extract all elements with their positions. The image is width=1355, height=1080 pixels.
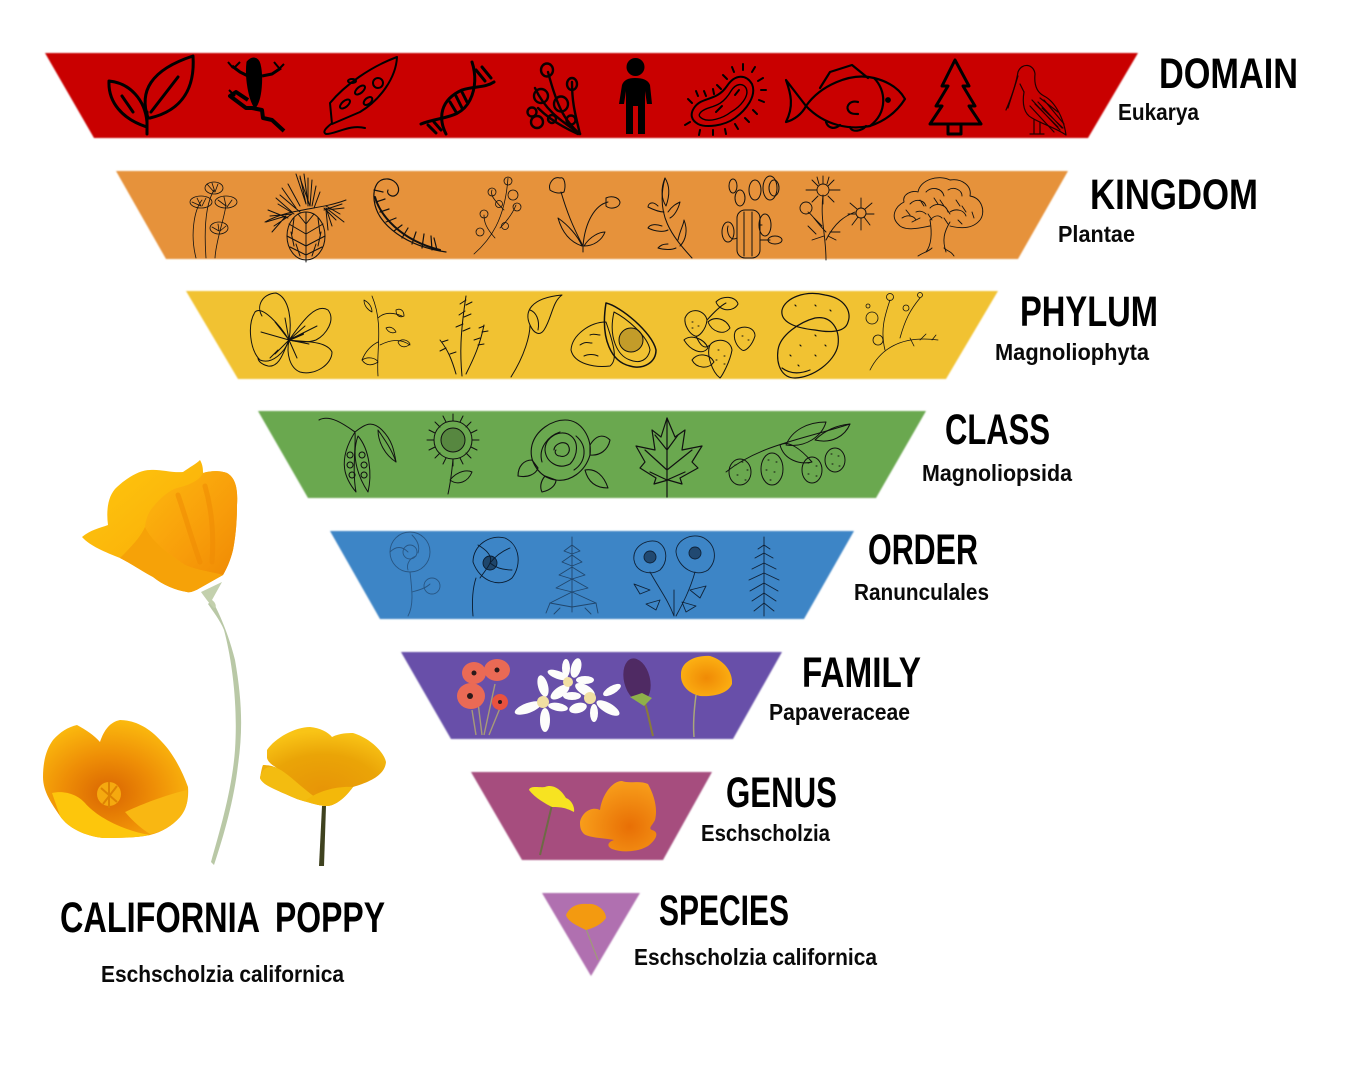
icon: cactus [722,176,782,258]
label: california poppy title: POPPY [275,894,385,942]
icon: potatoes [778,293,849,378]
label: phylum: PHYLUM [1020,288,1158,336]
icon: leafy branch [648,178,692,258]
icon: white bloodroot flowers [513,657,623,732]
icon: orange poppy [681,656,732,737]
tier: class [258,411,926,498]
icon: pea pods [319,418,396,492]
flower: cup bloom with stem [260,727,386,866]
icon: avocado [571,303,656,367]
icon: rose [518,420,610,492]
icon: poppy sketch dark [472,537,518,616]
icon: hibiscus [250,293,332,373]
icon: frog [228,58,284,131]
tier: family [401,652,782,739]
icon: red poppies [457,659,510,735]
tier: kingdom [116,171,1068,262]
icon: yellow poppy [529,786,574,855]
icon: strawberries [684,297,755,378]
icon: fern fiddlehead [374,179,446,252]
tier: order [330,531,854,619]
icon: oak tree [894,178,983,256]
label: family: FAMILY [802,649,921,697]
sublabel: papaveraceae: Papaveraceae [769,699,910,725]
band: phylum [186,291,998,379]
icon: maple leaf [636,418,702,497]
icon: plant sprout [109,56,193,134]
band: genus [471,772,712,860]
icon: sunflower [427,414,479,494]
icon: bacterium [685,64,766,135]
icon: poppy sketch faint [390,532,440,616]
label: class: CLASS [945,406,1050,454]
label: california poppy title: CALIFORNIA [60,894,260,942]
tier: genus [471,772,712,860]
band: family [401,652,782,739]
icon: euglena [324,57,397,134]
sublabel: plantae: Plantae [1058,221,1135,247]
tier: phylum [186,291,998,379]
icon: poppy group [634,536,714,616]
label: species: SPECIES [659,887,789,935]
label: genus: GENUS [726,769,837,817]
flower: open bloom [43,720,188,838]
band: kingdom [116,171,1068,259]
label: domain: DOMAIN [1159,50,1298,98]
sublabel: eschscholzia: Eschscholzia [701,820,830,846]
band: domain [45,53,1138,138]
band: order [330,531,854,619]
icon: fish [786,65,905,131]
icon: blossom branch [866,292,938,370]
icon: leafy stalk [749,537,779,616]
tier: domain [45,53,1138,138]
sublabel: eschscholzia californica: Eschscholzia californica [634,944,877,970]
sublabel: ranunculales: Ranunculales [854,579,989,605]
tier: species [542,893,640,976]
icon: pine branch with cone [265,174,346,262]
icon: mushrooms [528,64,580,134]
icon: orange poppy open [580,781,656,851]
icon: coneflowers [190,182,237,258]
icon: flowering herb [362,296,410,376]
icon: person [619,58,652,134]
icon: raspberry branch [726,422,850,485]
sublabel: eukarya: Eukarya [1118,99,1199,125]
icon: delphinium spike [546,537,598,614]
icon: herb sprig [474,177,521,254]
band: class [258,411,926,498]
icon: pine tree [930,60,981,134]
sublabel: magnoliopsida: Magnoliopsida [922,460,1072,486]
illustration: california poppy photos [43,460,386,866]
icon: calla lily [511,295,562,377]
label: order: ORDER [868,526,978,574]
icon: lavender sprigs [440,296,488,376]
icon: pelican [1006,65,1066,135]
icon: poppy on stem [566,904,606,960]
sublabel: magnoliophyta: Magnoliophyta [995,339,1149,365]
flower: side view on long stem [82,460,241,865]
icon: dna helix [421,62,494,134]
label: kingdom: KINGDOM [1090,171,1258,219]
icon: daisy cluster [800,176,874,260]
icon: purple flower spike [619,656,655,736]
band: species [542,893,640,976]
icon: poppy line drawing [550,178,620,252]
label: california poppy scientific name: Eschscholzia californica [101,961,344,987]
